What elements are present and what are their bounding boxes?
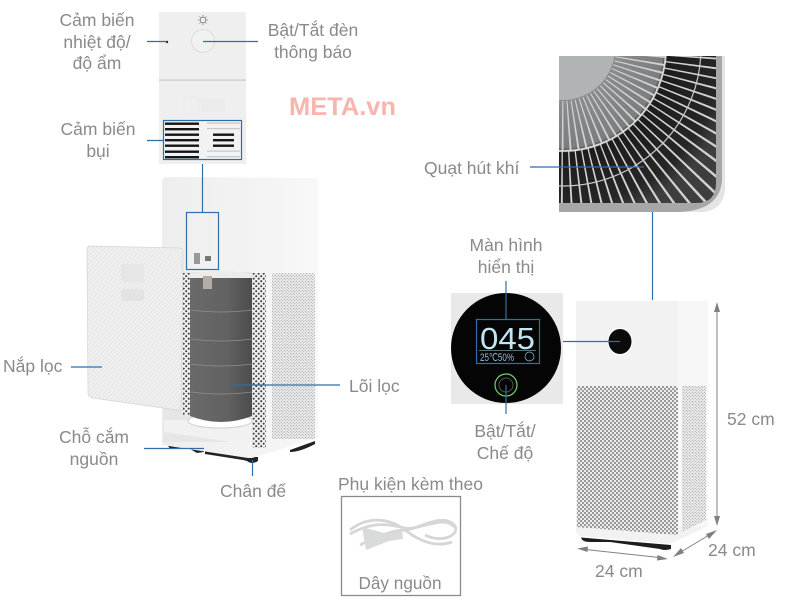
label: dust sensor: bụi: [86, 141, 110, 161]
label: power cord: Dây nguồn: [358, 573, 442, 593]
arrow: height: [714, 302, 720, 526]
label: filter core: Lõi lọc: [349, 376, 400, 396]
label: temperature and humidity sensor: độ ẩm: [73, 53, 121, 73]
dimension arrows: [577, 302, 720, 560]
filter door: [87, 246, 183, 410]
status readout: 25℃50%: [480, 352, 514, 364]
label: intake fan: Quạt hút khí: [424, 158, 519, 178]
label: temperature and humidity sensor: Cảm biến: [60, 10, 134, 30]
purifier body: [162, 177, 318, 458]
panel: open purifier: [87, 177, 318, 463]
cord: [350, 520, 456, 545]
bay lower shelf: [164, 420, 252, 445]
label: power socket: Chỗ cắm: [59, 426, 129, 447]
icon: brightness sun: [198, 15, 208, 25]
panel: purifier front view: [576, 301, 708, 550]
logo: META.vn: META.vn: [289, 93, 396, 121]
power cord photo box: [342, 496, 460, 596]
label: temperature and humidity sensor: nhiệt độ/: [63, 32, 131, 52]
label: display: Màn hình: [470, 235, 542, 255]
leader lines: [71, 42, 652, 476]
plug: [362, 527, 403, 550]
label: depth 24 cm: 24 cm: [708, 540, 756, 560]
filter bay: [163, 272, 252, 442]
laser sensor faint mark: [184, 97, 225, 114]
side perforations: [252, 273, 266, 448]
rear sensor panel with blue box: [186, 212, 218, 270]
label: power and mode: Bật/Tắt/: [474, 420, 536, 441]
button circle: [192, 30, 214, 52]
AQI readout: 045: [480, 321, 535, 356]
side grille: [682, 386, 706, 532]
label: notification light toggle: thông báo: [274, 42, 352, 62]
dust sensor vents: [164, 120, 242, 160]
arrow: width: [577, 546, 668, 560]
label: accessories: Phụ kiện kèm theo: [338, 474, 483, 494]
icon: power button: [495, 374, 517, 396]
front grille: [577, 386, 678, 535]
base and feet: [167, 441, 315, 463]
filter cartridge: [188, 271, 252, 428]
icon: auto mode: [525, 352, 534, 361]
label: notification light toggle: Bật/Tắt đèn: [268, 19, 358, 40]
feet: [581, 538, 671, 550]
label: height 52 cm: 52 cm: [727, 409, 775, 429]
label: power socket: nguồn: [70, 449, 118, 469]
label: base: Chân đế: [220, 481, 286, 501]
display window: [608, 328, 632, 354]
panel: sensor close-up: [159, 12, 246, 164]
temperature sensor dot: [166, 41, 168, 43]
bay perforation: [183, 273, 191, 415]
label: display: hiển thị: [478, 257, 534, 277]
panel: display close-up: [451, 293, 563, 404]
label: dust sensor: Cảm biến: [61, 119, 135, 139]
label: filter cover: Nắp lọc: [3, 355, 63, 376]
label: power and mode: Chế độ: [477, 443, 533, 463]
label: width 24 cm: 24 cm: [595, 561, 643, 581]
arrow: depth: [673, 530, 717, 557]
panel: fan grille close-up: [559, 56, 725, 212]
